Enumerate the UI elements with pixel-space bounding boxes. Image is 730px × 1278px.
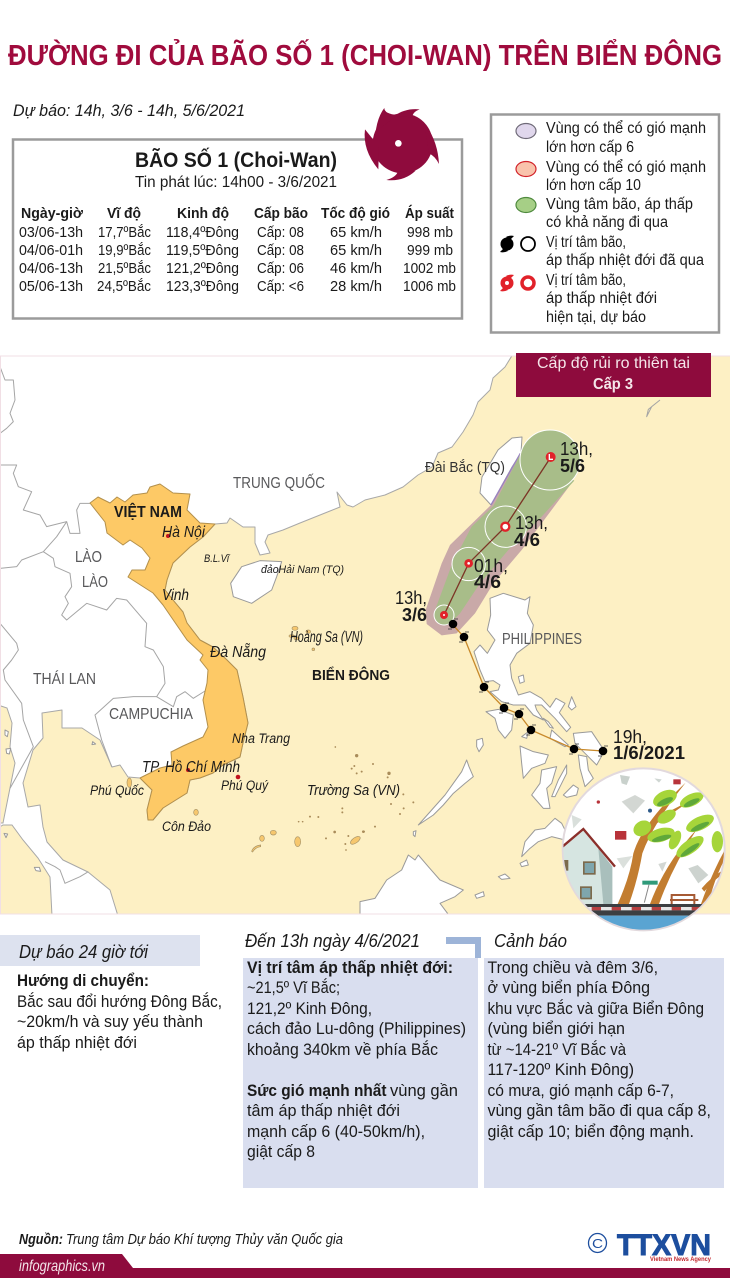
table row 1: Cấp: 08 [257, 224, 304, 241]
panel heading: Đến 13h ngày 4/6/2021 [245, 931, 420, 951]
table row 2: 19,9ºBắc [98, 242, 151, 259]
track time labels: 13h, [395, 588, 427, 608]
source line: Nguồn: [19, 1231, 63, 1248]
legend text: past position: áp thấp nhiệt đới đã qua [546, 252, 704, 269]
map labels: Vietnam: Đà Nẵng [210, 644, 266, 661]
panel: warning [484, 931, 724, 1188]
table header row: Ngày-giờ [21, 205, 83, 222]
table row 2 [19, 242, 453, 259]
table row 2: Cấp: 08 [257, 242, 304, 259]
legend text: wind level 6 [546, 120, 706, 156]
logo: TTXVN: C [592, 1236, 603, 1251]
table row 1 [19, 224, 453, 241]
table row 3: Cấp: 06 [257, 260, 304, 277]
land borders [0, 367, 207, 883]
map labels: Vietnam: đảoHải Nam (TQ) [261, 564, 344, 576]
flying debris [572, 775, 708, 883]
source line: Trung tâm Dự báo Khí tượng Thủy văn Quốc gia [66, 1231, 343, 1248]
map labels: countries: TRUNG QUỐC [233, 472, 325, 492]
illustration: storm scene [562, 768, 728, 932]
road and flood water [585, 904, 702, 930]
past position markers [448, 619, 608, 756]
risk level banner [516, 353, 711, 397]
panel: legend [491, 114, 719, 332]
map labels: countries [33, 459, 582, 723]
green path zone [434, 430, 580, 625]
past track [448, 619, 608, 756]
footer band [0, 1254, 730, 1278]
movement text [17, 992, 222, 1052]
logo: TTXVN: TTXVN [617, 1229, 711, 1262]
table row 4: 28 km/h [330, 278, 382, 295]
position text: 121,2º Kinh Đông, [247, 999, 372, 1018]
table row 3: 04/06-13h [19, 260, 83, 277]
table row 3: 121,2ºĐông [166, 260, 239, 277]
panel background [243, 958, 478, 1188]
map labels: Vietnam: Phú Quý [221, 778, 269, 793]
table row 2: 65 km/h [330, 242, 382, 259]
legend text: wind level 10 [546, 159, 706, 194]
legend swatch: green [516, 198, 536, 212]
track time labels: 19h, [613, 727, 647, 747]
map labels: Vietnam: B.L.Vĩ [204, 553, 231, 565]
table row 3: 46 km/h [330, 260, 382, 277]
legend text: wind level 6: Vùng có thể có gió mạnh [546, 120, 706, 137]
warning text: vùng gần tâm bão đi qua cấp 8, [488, 1101, 711, 1120]
Philippines south and Borneo [360, 730, 605, 917]
table row 4: 123,3ºĐông [166, 278, 239, 295]
table row 3 [19, 260, 456, 277]
warning text: Trong chiều và đêm 3/6, [488, 958, 658, 977]
map panel [0, 353, 730, 932]
table row 2: 04/06-01h [19, 242, 83, 259]
map labels: countries: LÀO [82, 572, 108, 591]
legend text: current position: hiện tại, dự báo [546, 309, 646, 326]
connector bracket [446, 937, 481, 958]
legend text: wind level 10: Vùng có thể có gió mạnh [546, 159, 706, 176]
logo: TTXVN: Vietnam News Agency [650, 1256, 711, 1263]
forecast track [444, 457, 551, 615]
warning text: (vùng biển giới hạn [488, 1019, 625, 1038]
legend text: wind level 6: lớn hơn cấp 6 [546, 139, 634, 156]
table header row: Cấp bão [254, 205, 308, 222]
website: infographics.vn [19, 1258, 105, 1275]
map labels: Vietnam: Phú Quốc [90, 783, 144, 798]
panel background [484, 958, 724, 1188]
position text: khoảng 340km về phía Bắc [247, 1040, 438, 1059]
track time labels: 13h, [560, 439, 593, 459]
legend swatch: purple [516, 124, 536, 138]
table row 4: 1006 mb [403, 278, 456, 295]
Andaman sea [0, 705, 52, 916]
map labels: Vietnam: TP. Hồ Chí Minh [142, 759, 240, 776]
Taiwan island [480, 437, 522, 505]
outer wind zone [426, 453, 569, 635]
table header row: Vĩ độ [107, 205, 141, 222]
warning text: có mưa, gió mạnh cấp 6-7, [488, 1081, 674, 1100]
table row 4: 05/06-13h [19, 278, 83, 295]
small north-east island [647, 400, 660, 417]
table header row [21, 205, 454, 222]
table header row: Kinh độ [177, 205, 229, 222]
Luzon and Mindoro [474, 593, 576, 738]
table row 2: 999 mb [407, 242, 453, 259]
track time labels: 4/6 [514, 530, 540, 550]
legend text: current position: áp thấp nhiệt đới [546, 290, 657, 307]
road sign and fence [642, 881, 698, 904]
legend text: wind level 10: lớn hơn cấp 10 [546, 177, 641, 194]
table heading: BÃO SỐ 1 (Choi-Wan) [135, 148, 337, 172]
map labels: Vietnam: Nha Trang [232, 731, 290, 746]
position text: cách đảo Lu-dông (Philippines) [247, 1019, 466, 1038]
wind text: tâm áp thấp nhiệt đới [247, 1101, 400, 1120]
heading bar [0, 935, 200, 966]
track time labels: 4/6 [474, 572, 501, 592]
trees [618, 783, 726, 904]
warning text: giật cấp 10; biển động mạnh. [488, 1122, 694, 1141]
house [562, 829, 615, 904]
track time labels: 01h, [474, 556, 508, 576]
Hainan island [231, 561, 282, 603]
wind text: mạnh cấp 6 (40-50km/h), [247, 1122, 425, 1141]
panel: 24h forecast [0, 935, 222, 1052]
table row 1: 998 mb [407, 224, 453, 241]
legend text: storm path zone [546, 196, 693, 231]
legend text: past position: Vị trí tâm bão, [546, 234, 626, 251]
warning text: từ ~14-21º Vĩ Bắc và [488, 1040, 626, 1059]
map labels: East Sea: Hoàng Sa (VN) [290, 629, 363, 646]
track time labels [395, 439, 685, 763]
table header row: Áp suất [405, 205, 454, 222]
forecast period: Dự báo: 14h, 3/6 - 14h, 5/6/2021 [13, 101, 245, 120]
warning text: 117-120º Kinh Đông) [488, 1060, 634, 1079]
legend icons: current position [500, 275, 534, 291]
Vietnam [90, 484, 248, 820]
legend swatch: red [516, 162, 536, 176]
track time labels: 1/6/2021 [613, 743, 685, 763]
map labels: countries: THÁI LAN [33, 669, 96, 688]
table row 3: 21,5ºBắc [98, 260, 151, 277]
map labels: East Sea: Trường Sa (VN) [307, 782, 400, 799]
heading text: Dự báo 24 giờ tới [19, 942, 149, 962]
icon: typhoon [365, 108, 439, 180]
table row 1: 65 km/h [330, 224, 382, 241]
wind text: Sức gió mạnh nhất [247, 1081, 387, 1100]
table row 1: 17,7ºBắc [98, 224, 151, 241]
table row 4: 24,5ºBắc [97, 278, 151, 295]
warning text: ở vùng biển phía Đông [488, 978, 650, 997]
legend text: past position [546, 234, 704, 269]
table row 4 [19, 278, 456, 295]
wind text [247, 1081, 458, 1161]
table row 4: Cấp: <6 [257, 278, 304, 295]
map labels: countries: CAMPUCHIA [109, 706, 193, 723]
radius circles [434, 430, 580, 625]
map labels: Vietnam: VIỆT NAM [114, 503, 182, 521]
risk level banner: Cấp 3 [593, 376, 633, 393]
warning text: khu vực Bắc và giữa Biển Đông [488, 999, 704, 1018]
position text: Vị trí tâm áp thấp nhiệt đới: [247, 958, 453, 977]
position text: ~21,5º Vĩ Bắc; [247, 978, 340, 997]
warning text [488, 958, 711, 1141]
table row 1: 03/06-13h [19, 224, 83, 241]
map labels: countries: LÀO [75, 547, 102, 566]
wind text: giật cấp 8 [247, 1142, 315, 1161]
issued time: Tin phát lúc: 14h00 - 3/6/2021 [135, 174, 337, 191]
legend icons: past position [500, 236, 535, 252]
movement text: áp thấp nhiệt đới [17, 1033, 137, 1052]
panel: position at 13h 4/6 [243, 931, 478, 1188]
table row 3: 1002 mb [403, 260, 456, 277]
wind text: vùng gần [390, 1081, 458, 1100]
track time labels: 3/6 [402, 605, 427, 625]
map labels: Vietnam [90, 503, 344, 834]
table row 1: 118,4ºĐông [166, 224, 239, 241]
legend text: current position: Vị trí tâm bão, [546, 272, 626, 289]
Hoàng Sa and Trường Sa islets [127, 626, 365, 852]
map labels: Vietnam: Côn Đảo [162, 819, 211, 834]
legend text: storm path zone: có khả năng đi qua [546, 214, 668, 231]
map labels: East Sea [290, 629, 400, 799]
risk level banner: Cấp độ rủi ro thiên tai [537, 355, 690, 372]
map labels: Vietnam: Hà Nội [162, 524, 205, 541]
forecast markers [440, 452, 556, 619]
map labels: countries: PHILIPPINES [502, 631, 582, 648]
table header row: Tốc độ gió [321, 205, 390, 222]
sea [23, 354, 730, 916]
position text [247, 958, 466, 1059]
legend text: current position [546, 272, 657, 326]
panel heading: Cảnh báo [494, 931, 567, 951]
map labels: East Sea: BIỂN ĐÔNG [312, 666, 390, 684]
movement text: ~20km/h và suy yếu thành [17, 1012, 203, 1031]
table row 2: 119,5ºĐông [166, 242, 239, 259]
panel: storm data table [13, 140, 462, 318]
track time labels: 13h, [515, 513, 548, 533]
movement heading: Hướng di chuyển: [17, 971, 149, 990]
legend text: storm path zone: Vùng tâm bão, áp thấp [546, 196, 693, 213]
track time labels: 5/6 [560, 456, 585, 476]
movement text: Bắc sau đổi hướng Đông Bắc, [17, 992, 222, 1011]
map labels: Vietnam: Vinh [162, 587, 189, 604]
map labels: countries: Đài Bắc (TQ) [425, 459, 505, 476]
storm forecast cone [426, 430, 580, 635]
